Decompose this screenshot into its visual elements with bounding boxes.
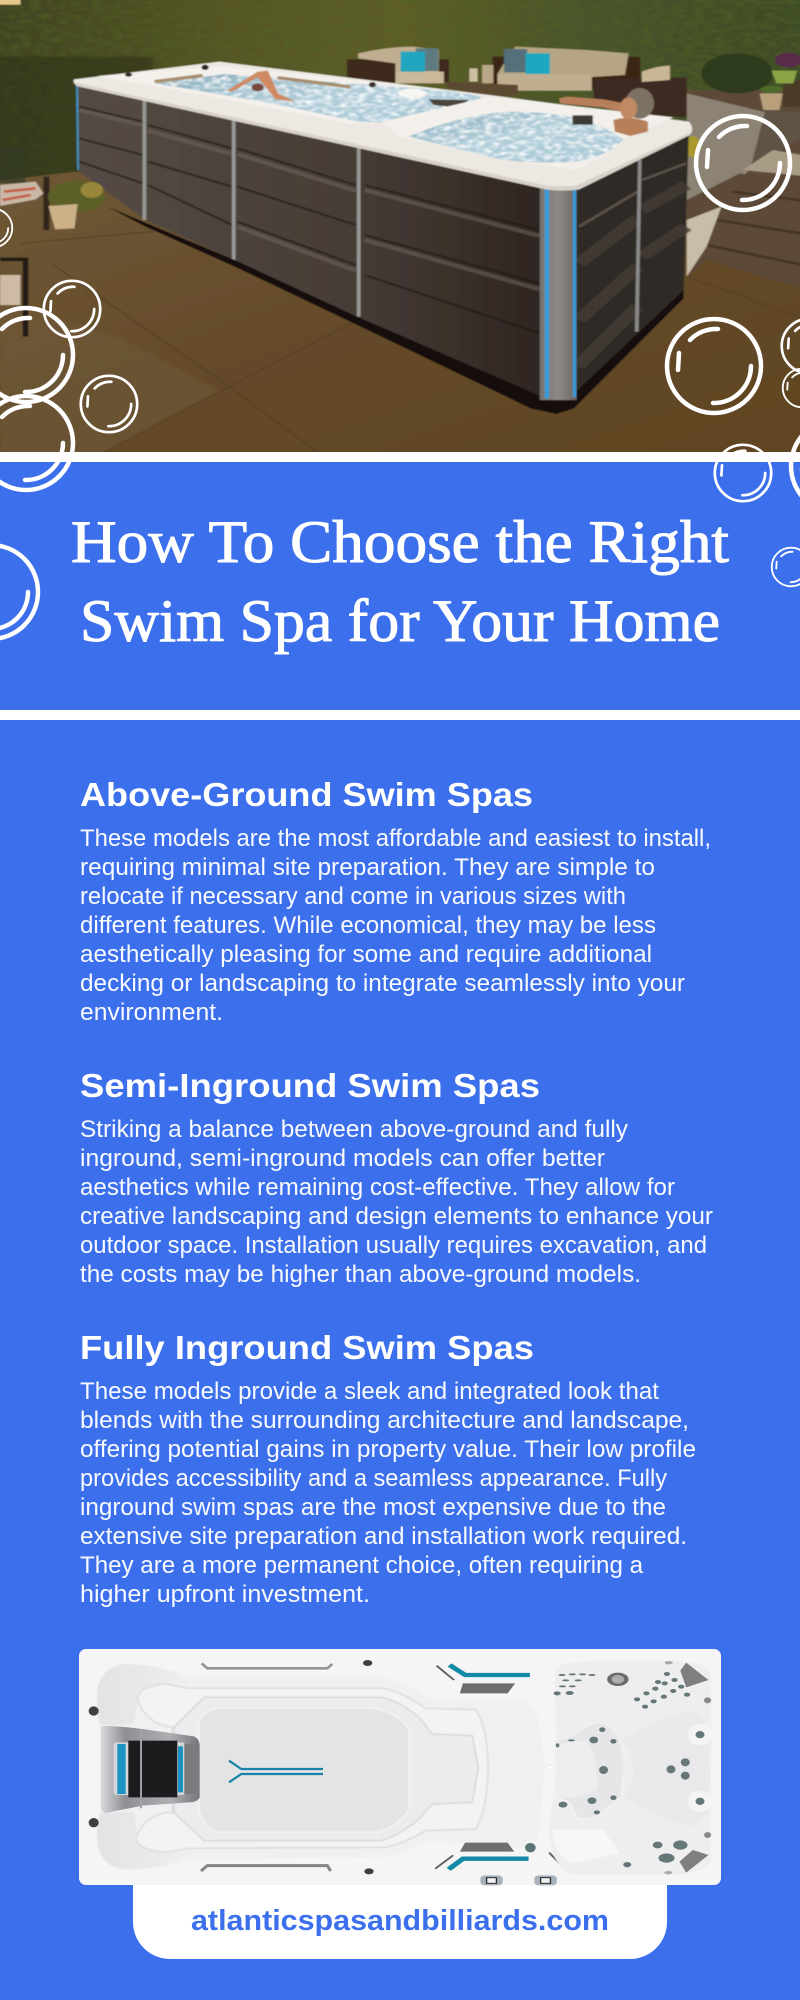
plants and pots on right: [686, 53, 800, 157]
text: fully inground description: provides accessibility and a seamless appearance. Fully: [80, 1465, 667, 1492]
white band below title: [0, 710, 800, 720]
white band above title: [0, 452, 800, 462]
text: above-ground description: different features. While economical, they may be less: [80, 912, 656, 939]
hedge backdrop: [0, 0, 800, 207]
title: Swim Spa for Your Home: [80, 588, 720, 654]
acrylic rim: [74, 62, 692, 190]
swim well steps: [97, 1664, 545, 1869]
section: fully inground swim spas: [80, 1329, 696, 1608]
text: above-ground description: environment.: [80, 999, 223, 1026]
text: above-ground description: decking or landscaping to integrate seamlessly into your: [80, 970, 685, 997]
heading: fully inground: Fully Inground Swim Spas: [80, 1329, 534, 1366]
swim end basin: [89, 1660, 545, 1874]
base shadow: [107, 207, 684, 414]
silver corner post with blue lights: [540, 188, 577, 400]
text: fully inground description: These models provide a sleek and integrated look that: [80, 1378, 659, 1405]
text: above-ground description: requiring minimal site preparation. They are simple to: [80, 854, 655, 881]
teal lane marker: [229, 1761, 323, 1782]
top view of swim spa shell: [79, 1649, 721, 1885]
text: fully inground description: higher upfront investment.: [80, 1581, 370, 1608]
swim end water: [97, 65, 485, 124]
patio sofas with teal cushions: [347, 47, 687, 117]
text: semi-inground description: outdoor space. Installation usually requires excavation, and: [80, 1232, 707, 1259]
website url: atlanticspasandbilliards.com: [191, 1905, 609, 1937]
heading: semi-inground: Semi-Inground Swim Spas: [80, 1067, 540, 1104]
spa jets: [554, 1661, 711, 1874]
text: semi-inground description: [80, 1116, 713, 1288]
text: semi-inground description: aesthetics while remaining cost-effective. They allow for: [80, 1174, 675, 1201]
text: fully inground description: inground swim spas are the most expensive due to the: [80, 1494, 666, 1521]
decorative bubbles: [0, 116, 800, 639]
spa end water: [383, 97, 673, 170]
control panels: [480, 1875, 557, 1885]
spa basin: [547, 1661, 713, 1874]
patio deck: [0, 167, 800, 460]
text: fully inground description: They are a more permanent choice, often requiring a: [80, 1552, 644, 1579]
heading: above-ground: Above-Ground Swim Spas: [80, 776, 533, 813]
text: above-ground description: relocate if necessary and come in various sizes with: [80, 883, 626, 910]
text: above-ground description: These models are the most affordable and easiest to install,: [80, 825, 711, 852]
section: above-ground swim spas: [80, 776, 711, 1026]
hero photo: swim spa on patio: [0, 0, 800, 460]
text: above-ground description: [80, 825, 711, 1026]
man relaxing in spa: [559, 88, 654, 136]
drains: [89, 1660, 374, 1874]
text: semi-inground description: creative landscaping and design elements to enhance your: [80, 1203, 713, 1230]
grab handles: [201, 1663, 332, 1871]
spa cabinet end panels: [574, 135, 689, 393]
text: fully inground description: blends with the surrounding architecture and landscape,: [80, 1407, 689, 1434]
text: fully inground description: extensive site preparation and installation work required.: [80, 1523, 687, 1550]
swimmer: [227, 71, 296, 102]
title: How To Choose the Right: [71, 509, 729, 575]
website pill: [133, 1870, 667, 1959]
left chair and flower pot: [0, 147, 105, 337]
right terrace and steps: [687, 90, 800, 292]
text: semi-inground description: inground, semi-inground models can offer better: [80, 1145, 605, 1172]
text: semi-inground description: the costs may be higher than above-ground models.: [80, 1261, 641, 1288]
text: semi-inground description: Striking a balance between above-ground and fully: [80, 1116, 628, 1143]
text: fully inground description: [80, 1378, 696, 1608]
teal accent bars and steps: [435, 1665, 566, 1869]
section: semi-inground swim spas: [80, 1067, 713, 1288]
swim jet machine: [101, 1726, 200, 1813]
spa cabinet front panels: [77, 86, 543, 398]
text: fully inground description: offering potential gains in property value. Their low profile: [80, 1436, 696, 1463]
text: above-ground description: aesthetically pleasing for some and require additional: [80, 941, 652, 968]
title: [71, 509, 729, 654]
